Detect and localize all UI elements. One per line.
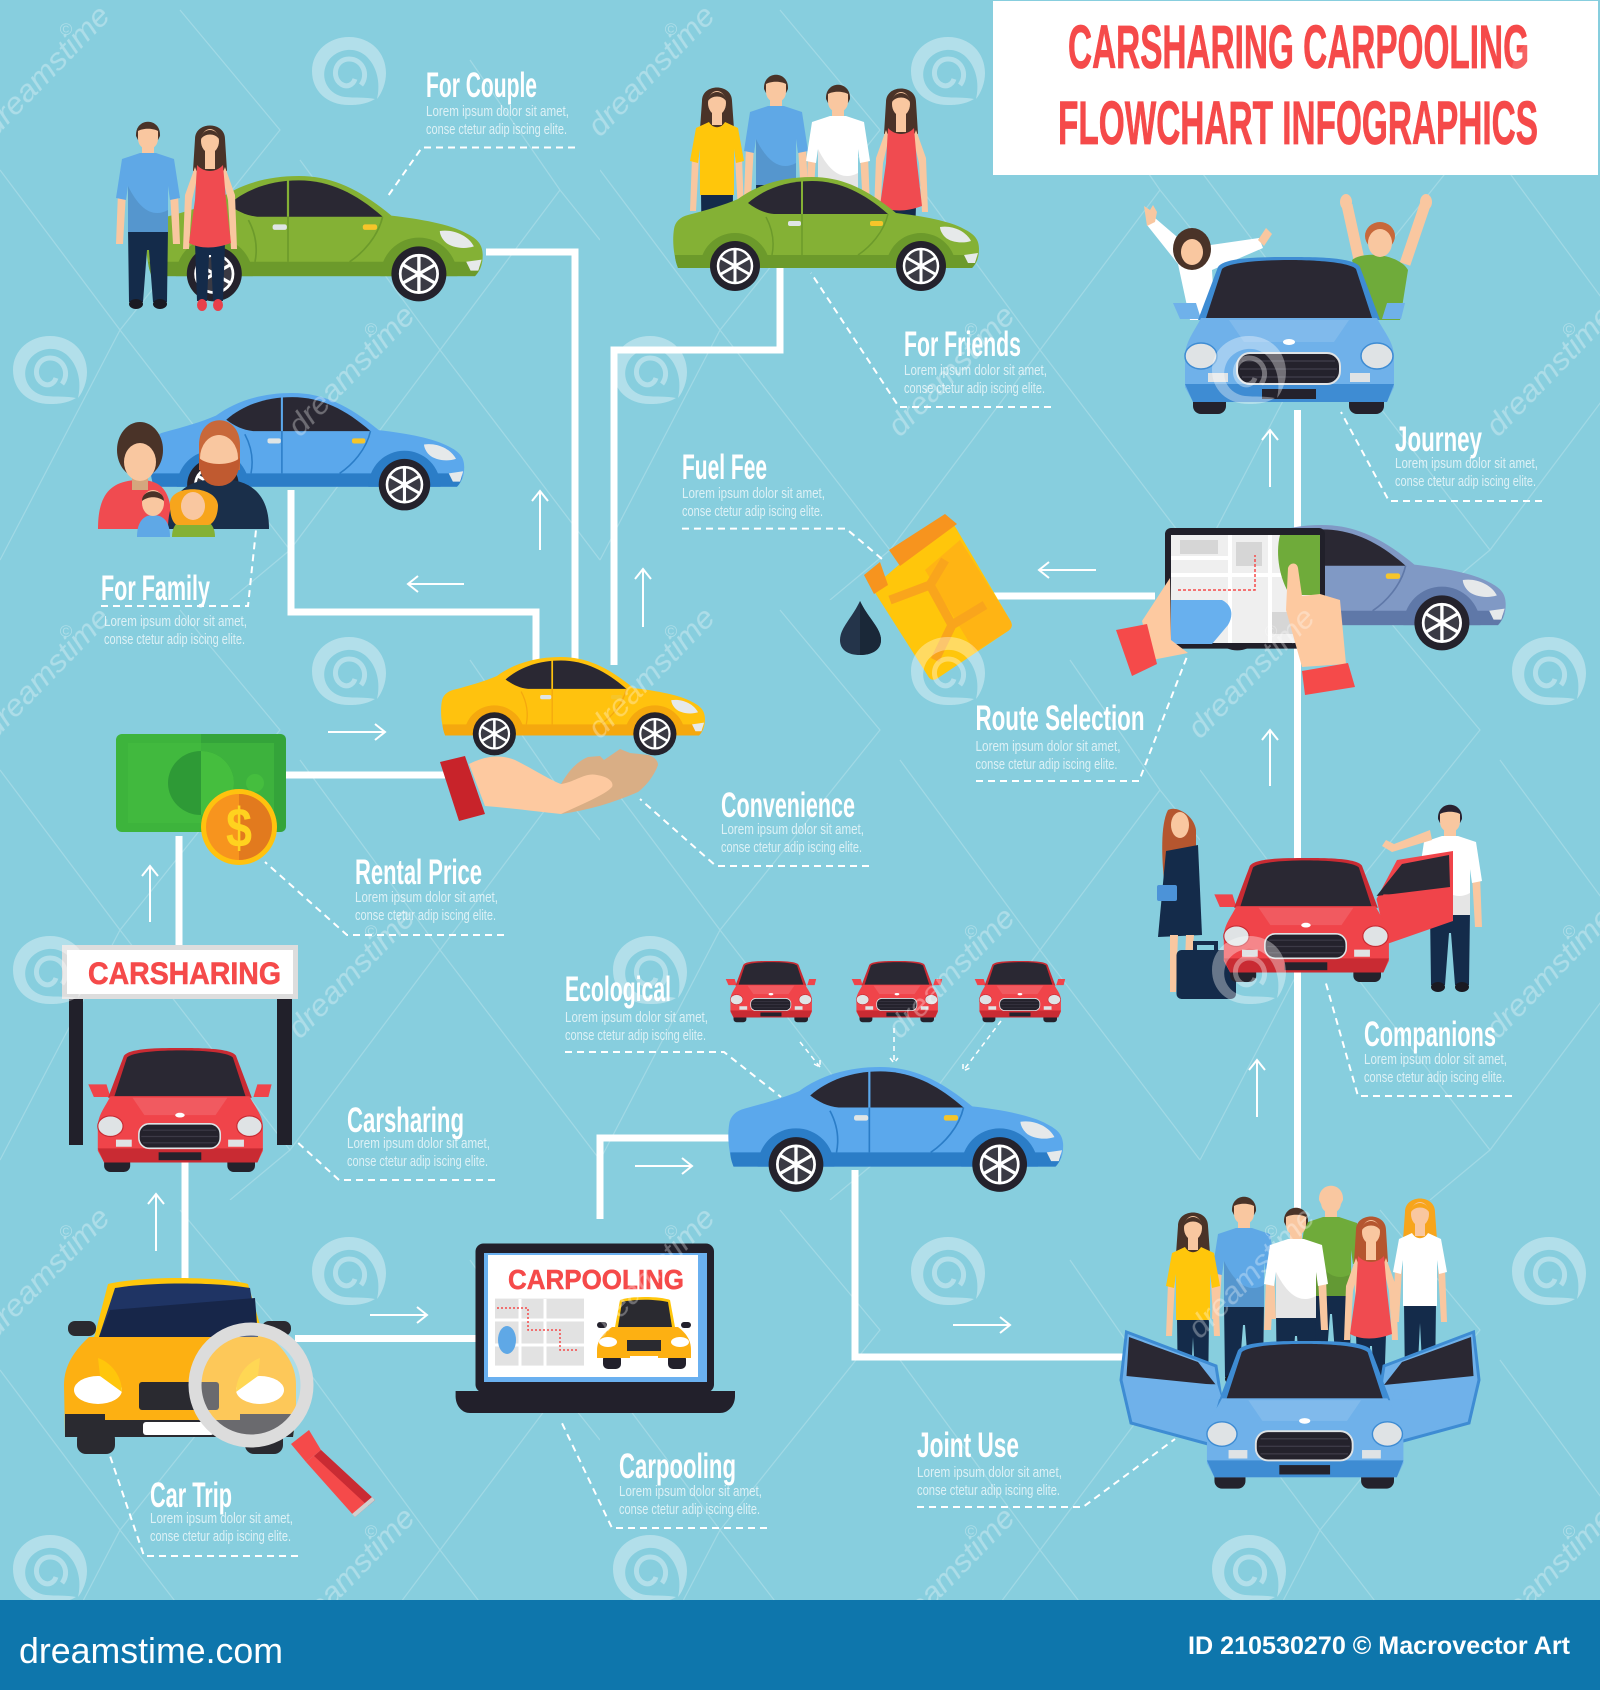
footer bar (0, 1600, 1600, 1690)
label: Carpooling: Lorem ipsum dolor sit amet, (619, 1483, 762, 1500)
label: Rental Price (265, 853, 504, 935)
label: Route Selection (976, 654, 1188, 781)
watermark: dreamstime text: dreamstime (880, 298, 1022, 443)
label: For Family: conse ctetur adip iscing elite. (104, 631, 245, 648)
footer bar: ID 210530270 © Macrovector Art (1188, 1632, 1571, 1660)
label: Rental Price: conse ctetur adip iscing elite. (355, 907, 496, 924)
illustration: laptop with carpooling page: CARPOOLING (508, 1264, 684, 1295)
label: Joint Use (917, 1426, 1175, 1507)
watermark: dreamstime text: © (1265, 1222, 1278, 1241)
title panel (993, 1, 1598, 175)
watermark: dreamstime text: © (665, 1222, 678, 1241)
label: Ecological (565, 970, 781, 1097)
label: Fuel Fee (682, 448, 882, 559)
illustration: companions with red car (1157, 805, 1482, 999)
illustration: jerry can with oil drop (840, 514, 1012, 680)
watermark: dreamstime text: © (665, 20, 678, 39)
illustration: couple with green car (116, 122, 483, 311)
label: Car Trip: Car Trip (150, 1476, 232, 1515)
label: For Couple: Lorem ipsum dolor sit amet, (426, 103, 569, 120)
label: For Family (101, 530, 256, 648)
label: For Couple: conse ctetur adip iscing elite. (426, 121, 567, 138)
watermark: dreamstime text: © (665, 622, 678, 641)
label: Fuel Fee: Lorem ipsum dolor sit amet, (682, 485, 825, 502)
watermark: dreamstime text: © (1265, 622, 1278, 641)
illustration: carsharing sign and red car: CARSHARING (88, 955, 281, 991)
watermark: dreamstime text: © (365, 1522, 378, 1541)
illustration: journey car with waving people (1144, 194, 1432, 414)
watermark: dreamstime text: dreamstime (280, 900, 422, 1045)
label: For Friends (811, 273, 1051, 407)
label: Carsharing: conse ctetur adip iscing elite. (347, 1153, 488, 1170)
watermark: dreamstime text: dreamstime (880, 900, 1022, 1045)
label: For Friends: For Friends (904, 325, 1021, 364)
label: Journey: conse ctetur adip iscing elite. (1395, 473, 1536, 490)
illustration: yellow car with magnifier (64, 1278, 375, 1517)
label: Route Selection: Route Selection (976, 699, 1144, 738)
label: For Friends: conse ctetur adip iscing elite. (904, 380, 1045, 397)
watermark: dreamstime text: © (60, 1222, 73, 1241)
label: Rental Price: Lorem ipsum dolor sit amet, (355, 889, 498, 906)
label: Journey: Journey (1395, 420, 1482, 459)
label: Ecological: conse ctetur adip iscing elite. (565, 1027, 706, 1044)
label: Carsharing (296, 1101, 495, 1180)
watermark: dreamstime text: © (60, 622, 73, 641)
label: Convenience (640, 786, 869, 866)
label: Ecological: Ecological (565, 970, 671, 1009)
label: Carsharing: Carsharing (347, 1101, 464, 1140)
label: For Couple (388, 66, 575, 196)
watermark: dreamstime text: dreamstime (580, 0, 722, 143)
illustration: family with blue car (98, 393, 464, 537)
label: Companions: Companions (1364, 1015, 1496, 1054)
label: Carpooling: Carpooling (619, 1447, 736, 1486)
label: Car Trip: Lorem ipsum dolor sit amet, (150, 1510, 293, 1527)
illustration: joint use group with blue car (1121, 1186, 1479, 1489)
label: Joint Use: Joint Use (917, 1426, 1019, 1465)
label: For Family: For Family (101, 569, 210, 608)
watermark: dreamstime text: © (965, 1522, 978, 1541)
label: Route Selection: Lorem ipsum dolor sit amet, (976, 738, 1120, 755)
label: Ecological: Lorem ipsum dolor sit amet, (565, 1009, 708, 1026)
illustration: three small red cars (726, 961, 1065, 1071)
small direction arrows (142, 430, 1278, 1333)
label: Carpooling: conse ctetur adip iscing elite. (619, 1501, 760, 1518)
label: Fuel Fee: conse ctetur adip iscing elite. (682, 503, 823, 520)
label: For Friends: Lorem ipsum dolor sit amet, (904, 362, 1047, 379)
watermark: dreamstime text: © (1563, 320, 1576, 339)
label: For Couple: For Couple (426, 66, 537, 105)
watermark: dreamstime text: © (965, 320, 978, 339)
label: Companions (1325, 980, 1512, 1096)
watermark: dreamstime text: dreamstime (1180, 600, 1322, 745)
label: Carsharing: Lorem ipsum dolor sit amet, (347, 1135, 490, 1152)
illustration: big blue car (728, 1067, 1063, 1192)
watermark: dreamstime text: © (60, 20, 73, 39)
label: Companions: conse ctetur adip iscing elite. (1364, 1069, 1505, 1086)
watermark: dreamstime text: dreamstime (580, 1200, 722, 1345)
watermark: dreamstime text: © (365, 922, 378, 941)
watermark: dreamstime text: © (365, 320, 378, 339)
flow connector lines (179, 252, 1298, 1357)
footer bar: dreamstime.com (19, 1630, 283, 1671)
watermark: dreamstime text: © (965, 922, 978, 941)
illustration: money and coin: $ (226, 796, 252, 859)
watermark: dreamstime text: dreamstime (880, 1500, 1022, 1645)
label: Convenience: Lorem ipsum dolor sit amet, (721, 821, 864, 838)
illustration: laptop with carpooling page (456, 1244, 735, 1413)
label: Fuel Fee: Fuel Fee (682, 448, 767, 487)
label: Rental Price: Rental Price (355, 853, 482, 892)
label: Car Trip (109, 1453, 298, 1556)
label: Carpooling (560, 1419, 767, 1528)
illustration: yellow car on hand (440, 657, 705, 821)
label: For Family: Lorem ipsum dolor sit amet, (104, 613, 247, 630)
label: Journey (1341, 412, 1542, 501)
label: Car Trip: conse ctetur adip iscing elite. (150, 1528, 291, 1545)
label: Route Selection: conse ctetur adip iscing elite. (976, 756, 1118, 773)
label: Convenience: Convenience (721, 786, 855, 825)
watermark: dreamstime text: © (1563, 1522, 1576, 1541)
illustration: carsharing sign and red car (62, 945, 298, 1172)
label: Convenience: conse ctetur adip iscing elite. (721, 839, 862, 856)
label: Companions: Lorem ipsum dolor sit amet, (1364, 1051, 1507, 1068)
label: Journey: Lorem ipsum dolor sit amet, (1395, 455, 1538, 472)
watermark: dreamstime text: © (1563, 922, 1576, 941)
watermark: dreamstime text: dreamstime (280, 298, 422, 443)
label: Joint Use: Lorem ipsum dolor sit amet, (917, 1464, 1062, 1481)
illustration: money and coin (116, 734, 286, 865)
watermark: dreamstime text: dreamstime (280, 1500, 422, 1645)
watermark: dreamstime text: dreamstime (580, 600, 722, 745)
illustration: route selection tablet with car (1116, 525, 1506, 695)
illustration: friends with green car (673, 75, 979, 291)
label: Joint Use: conse ctetur adip iscing elite. (917, 1482, 1060, 1499)
watermark: dreamstime text: dreamstime (1180, 1200, 1322, 1345)
